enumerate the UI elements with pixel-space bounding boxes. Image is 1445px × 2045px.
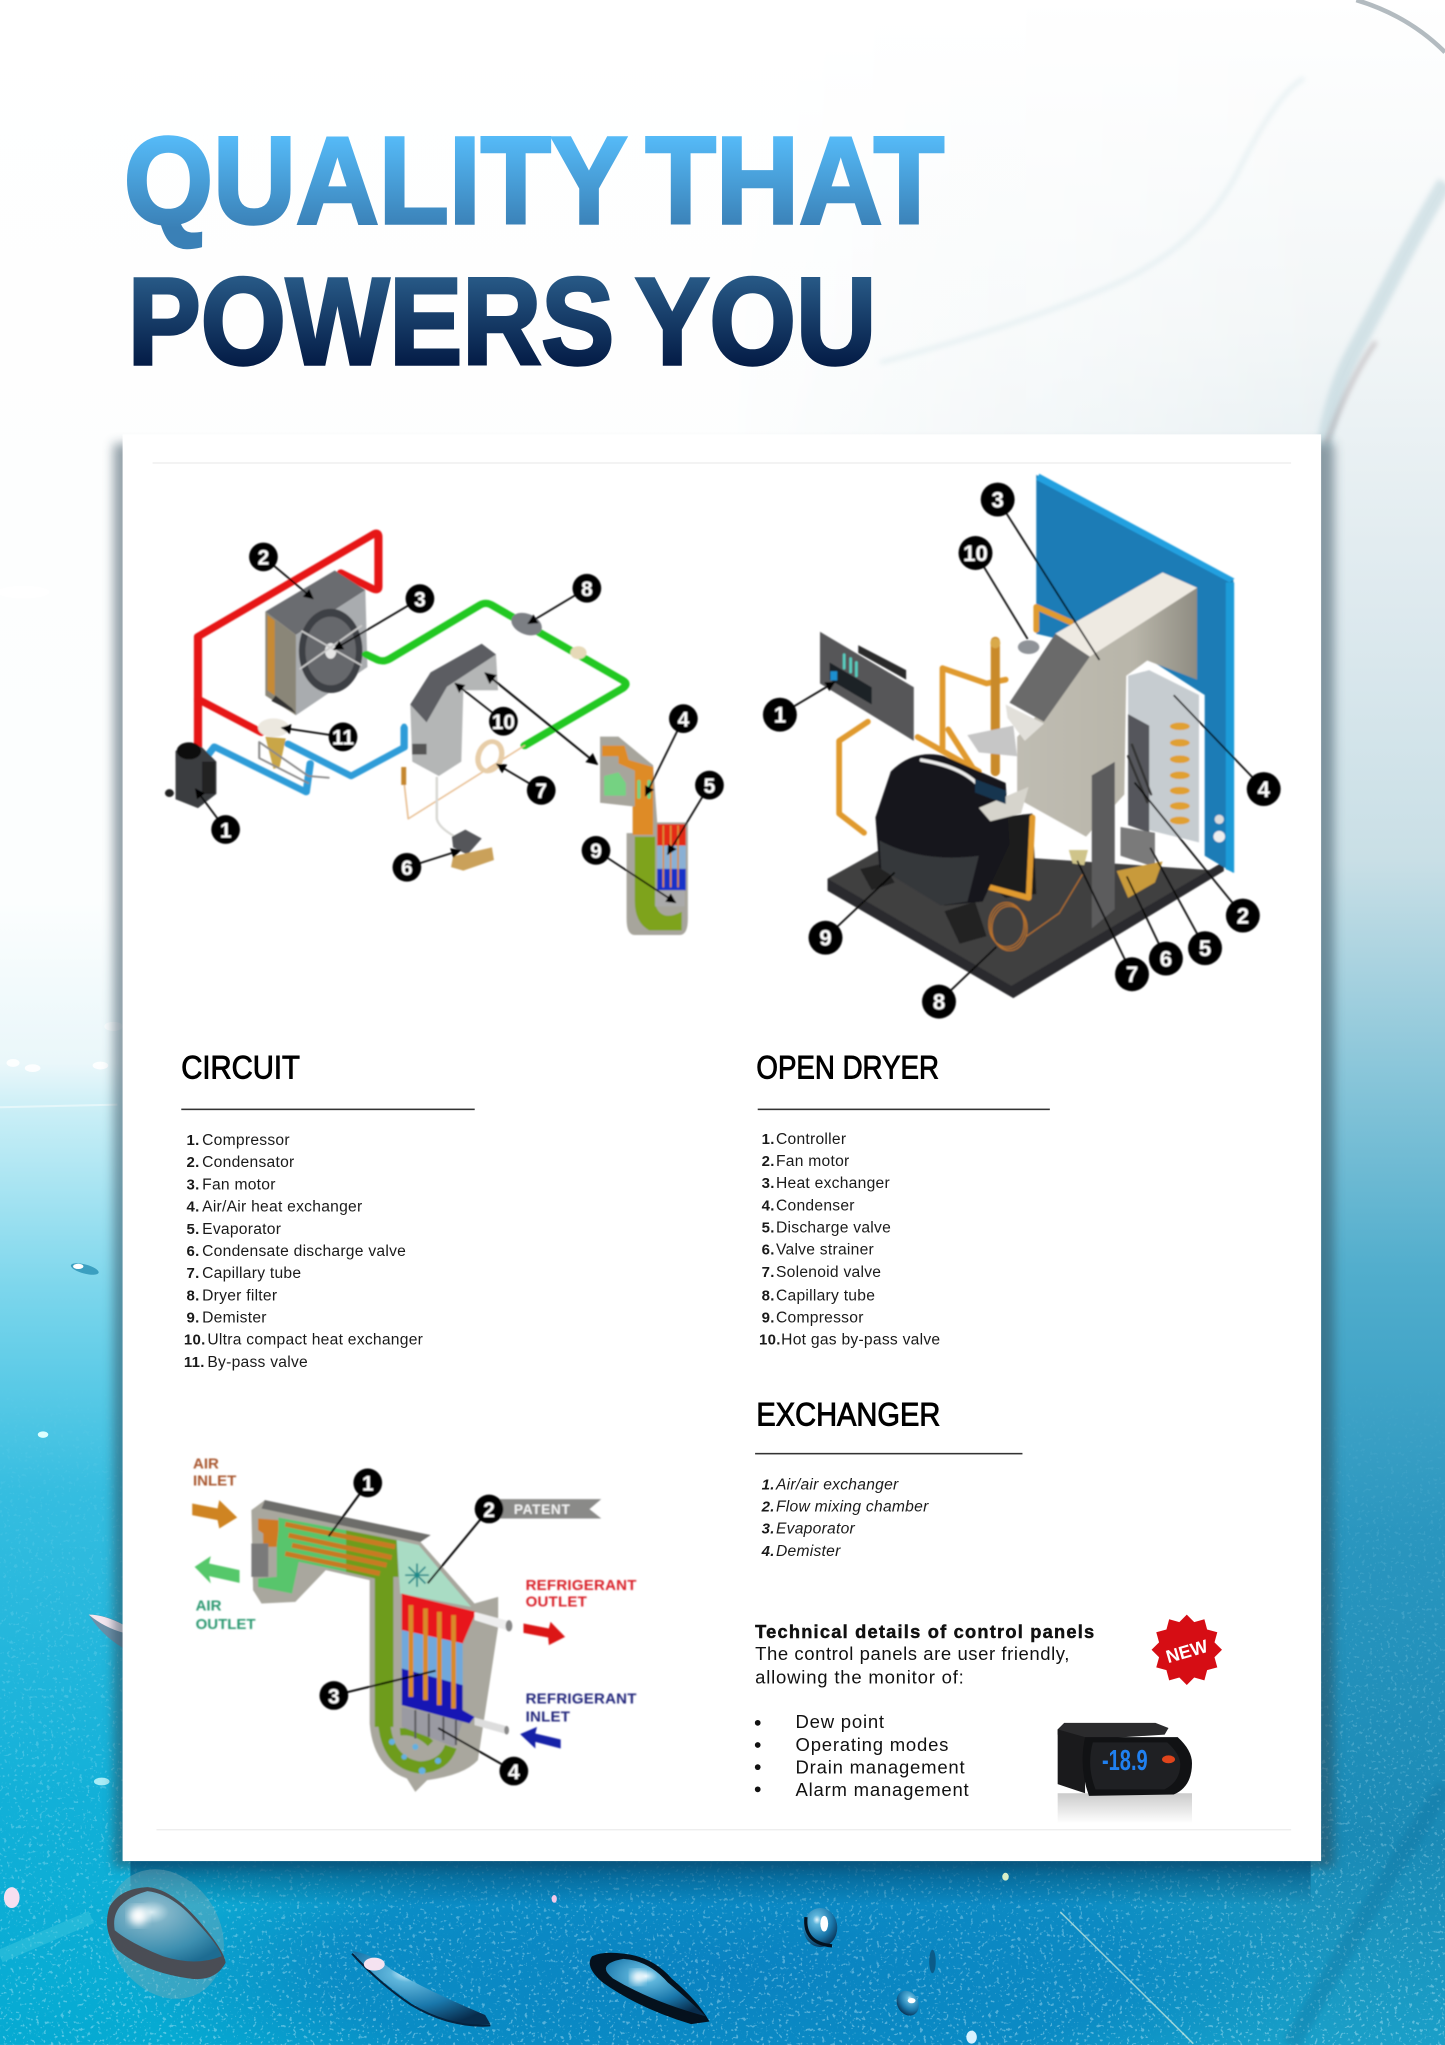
light streak <box>1060 1912 1193 2044</box>
label: air outlet <box>196 1598 256 1633</box>
text block: circuit list: Capillary tube <box>202 1265 301 1282</box>
housing <box>251 1500 498 1792</box>
green pipes <box>366 603 626 746</box>
callouts: open dryer: 2 <box>1237 903 1249 928</box>
text block: open dryer list <box>759 1131 940 1349</box>
text block: exchanger list: 1. <box>762 1476 775 1493</box>
text block: circuit list: By-pass valve <box>207 1354 308 1371</box>
compressor <box>860 863 895 890</box>
text block: open dryer list: Capillary tube <box>776 1287 875 1304</box>
text block: exchanger list: Flow mixing chamber <box>776 1499 929 1516</box>
label: air inlet <box>193 1456 236 1489</box>
text block: open dryer list: Valve strainer <box>776 1242 874 1259</box>
diagram: exchanger <box>192 1456 637 1792</box>
text block: exchanger list: Demister <box>776 1543 841 1560</box>
diagram: open dryer <box>763 474 1281 1019</box>
green air path <box>258 1518 346 1594</box>
icon: new badge: NEW <box>1163 1635 1211 1667</box>
text block: open dryer list: 9. <box>762 1309 775 1326</box>
text block: circuit list: Condensate discharge valve <box>202 1243 406 1260</box>
condensate tube and valve <box>437 778 455 837</box>
text block: open dryer list: Heat exchanger <box>776 1175 890 1192</box>
text block: technical details: Technical details of control panels <box>755 1621 1094 1642</box>
text block: circuit list: 8. <box>186 1287 200 1304</box>
text block: exchanger list: Air/air exchanger <box>775 1476 899 1493</box>
text block: technical details: The control panels are user friendly, <box>755 1643 1069 1664</box>
red pipes <box>198 533 378 751</box>
text block: open dryer list: 7. <box>762 1264 775 1281</box>
label: refrigerant outlet: OUTLET <box>526 1594 587 1611</box>
text block: open dryer list: Discharge valve <box>776 1219 891 1236</box>
callouts: open dryer: 7 <box>1126 962 1138 987</box>
mixing chamber <box>397 1540 471 1607</box>
inlet and outlet arrows <box>192 1500 237 1529</box>
callouts: circuit: 7 <box>535 780 547 803</box>
callouts: open dryer: 8 <box>933 989 945 1014</box>
callouts: circuit <box>211 543 724 882</box>
blue back panel <box>1036 475 1233 873</box>
text block: exchanger list: Evaporator <box>776 1521 856 1538</box>
text block: circuit list: 10. <box>184 1332 206 1349</box>
capillary coil <box>989 875 1082 951</box>
text block: circuit list: Compressor <box>202 1132 290 1149</box>
compressor <box>165 742 216 808</box>
panel: main white card <box>123 434 1321 1861</box>
text block: circuit list: 1. <box>186 1132 200 1149</box>
heat exchanger <box>1017 572 1197 837</box>
streak droplet <box>352 1951 490 2026</box>
list: control panel functions: Drain management <box>796 1757 965 1778</box>
callouts: open dryer: 3 <box>992 487 1004 512</box>
label: refrigerant inlet: INLET <box>526 1709 570 1726</box>
heading: open dryer: OPEN DRYER <box>756 1049 939 1086</box>
callouts: open dryer: 6 <box>1160 946 1172 971</box>
dryer filter <box>507 608 587 659</box>
text block: open dryer list: Hot gas by-pass valve <box>781 1332 940 1349</box>
label: refrigerant inlet: REFRIGERANT <box>526 1690 637 1707</box>
text block: open dryer list: 4. <box>762 1197 775 1214</box>
diagram: circuit <box>165 533 724 935</box>
text block: circuit list: 3. <box>186 1176 200 1193</box>
bracket and valves <box>1092 762 1115 928</box>
callouts: circuit: 3 <box>414 588 426 611</box>
callouts: exchanger: 2 <box>483 1499 495 1522</box>
callouts: circuit: 8 <box>581 578 593 601</box>
text block: exchanger list: 2. <box>761 1499 775 1516</box>
controller panel <box>820 632 914 741</box>
text block: technical details: allowing the monitor of: <box>755 1667 964 1688</box>
text block: open dryer list: Compressor <box>776 1309 864 1326</box>
text block: circuit list: 4. <box>186 1199 200 1216</box>
dark droplet <box>590 1953 709 2024</box>
text block: circuit list: 2. <box>186 1154 200 1171</box>
callouts: circuit: 10 <box>492 711 515 734</box>
title line 1: THAT <box>646 112 944 250</box>
callouts: open dryer <box>763 483 1281 1019</box>
label: refrigerant inlet <box>526 1690 637 1726</box>
callouts: exchanger <box>320 1469 528 1785</box>
label: air outlet: OUTLET <box>196 1616 256 1633</box>
list: control panel functions: Dew point <box>796 1711 885 1732</box>
label: patent: PATENT <box>514 1502 570 1517</box>
label: air inlet: AIR <box>193 1456 219 1473</box>
text block: open dryer list: Solenoid valve <box>776 1264 881 1281</box>
panel shadow <box>113 443 1334 1868</box>
list: control panel functions: Alarm management <box>796 1779 969 1800</box>
capillary and coil <box>404 746 525 819</box>
text block: exchanger list: 3. <box>762 1521 775 1538</box>
list: control panel functions: Operating modes <box>796 1734 949 1755</box>
list: control panel functions <box>755 1711 969 1800</box>
callouts: circuit: 11 <box>332 727 354 750</box>
text block: open dryer list: Condenser <box>776 1197 855 1214</box>
text block: open dryer list: 10. <box>759 1332 781 1349</box>
text block: open dryer list: Controller <box>776 1131 846 1148</box>
text block: circuit list: 9. <box>186 1309 200 1326</box>
callouts: circuit: 4 <box>678 708 690 731</box>
big droplet <box>84 1848 247 2020</box>
controller device: -18.9 <box>1102 1745 1148 1777</box>
text block: open dryer list: 8. <box>762 1287 775 1304</box>
text block: circuit list: Fan motor <box>202 1176 276 1193</box>
callouts: open dryer: 10 <box>963 541 988 566</box>
controller device <box>1058 1723 1192 1823</box>
text block: technical details <box>755 1621 1094 1688</box>
heading: circuit: CIRCUIT <box>181 1049 300 1086</box>
copper pipes <box>839 607 1071 898</box>
callouts: circuit: 6 <box>401 857 413 880</box>
callouts: exchanger: 1 <box>362 1473 374 1496</box>
heading: exchanger: EXCHANGER <box>756 1395 940 1432</box>
text block: open dryer list: 6. <box>762 1242 775 1259</box>
dark space under exchanger <box>990 814 1036 898</box>
text block: circuit list <box>184 1132 423 1371</box>
small droplets <box>4 1873 1009 2044</box>
text block: exchanger list <box>761 1476 929 1560</box>
text block: open dryer list: 5. <box>762 1219 775 1236</box>
ultra compact heat exchanger <box>410 644 498 776</box>
callouts: exchanger: 4 <box>508 1761 520 1784</box>
text block: open dryer list: Fan motor <box>776 1153 850 1170</box>
text block: exchanger list: 4. <box>761 1543 775 1560</box>
olive air path <box>346 1530 398 1727</box>
condenser block <box>1128 670 1199 842</box>
text block: circuit list: Ultra compact heat exchanger <box>207 1332 423 1349</box>
arrows: circuit <box>196 557 709 903</box>
text block: circuit list: Air/Air heat exchanger <box>202 1199 362 1216</box>
callouts: open dryer: 9 <box>819 926 832 951</box>
title line 2: YOU <box>635 253 876 391</box>
arrows: open dryer <box>780 500 1264 1002</box>
label: refrigerant outlet: REFRIGERANT <box>526 1577 637 1594</box>
text block: circuit list: 7. <box>186 1265 200 1282</box>
text block: circuit list: 11. <box>184 1354 205 1371</box>
title line 2: POWERS <box>128 253 614 391</box>
droplets: bottom water <box>4 1848 1193 2044</box>
text block: circuit list: Condensator <box>202 1154 294 1171</box>
callouts: open dryer: 5 <box>1199 936 1211 961</box>
base plate <box>828 848 1224 997</box>
demister <box>402 1707 463 1747</box>
text block: circuit list: 6. <box>186 1243 200 1260</box>
text block: open dryer list: 3. <box>762 1175 775 1192</box>
icon: new badge <box>1152 1615 1222 1685</box>
condenser <box>265 570 367 715</box>
label: air inlet: INLET <box>193 1472 236 1489</box>
shadow below panel <box>130 1861 1311 1905</box>
callouts: circuit: 1 <box>220 819 232 842</box>
patent ribbon <box>498 1499 601 1519</box>
callouts: circuit: 2 <box>258 547 269 570</box>
blue pipes <box>207 728 404 792</box>
title line 1 <box>124 112 944 250</box>
text block: open dryer list: 2. <box>762 1153 775 1170</box>
callouts: circuit: 9 <box>590 840 602 863</box>
callouts: open dryer: 4 <box>1258 777 1271 802</box>
cross-section <box>600 737 688 935</box>
callouts: open dryer: 1 <box>774 703 786 728</box>
text block: circuit list: 5. <box>186 1221 200 1238</box>
text block: circuit list: Dryer filter <box>202 1287 277 1304</box>
callouts: exchanger: 3 <box>328 1685 340 1708</box>
label: refrigerant outlet <box>526 1577 637 1611</box>
text block: circuit list: Demister <box>202 1309 267 1326</box>
text block: circuit list: Evaporator <box>202 1221 281 1238</box>
title line 1: QUALITY <box>124 112 627 250</box>
evaporator <box>402 1594 476 1644</box>
leader lines: exchanger <box>329 1483 514 1771</box>
by-pass valve <box>258 718 289 769</box>
label: air outlet: AIR <box>196 1598 222 1615</box>
callouts: circuit: 5 <box>704 775 716 798</box>
text block: open dryer list: 1. <box>762 1131 775 1148</box>
title <box>124 112 944 391</box>
droplets: left background <box>0 586 124 1785</box>
